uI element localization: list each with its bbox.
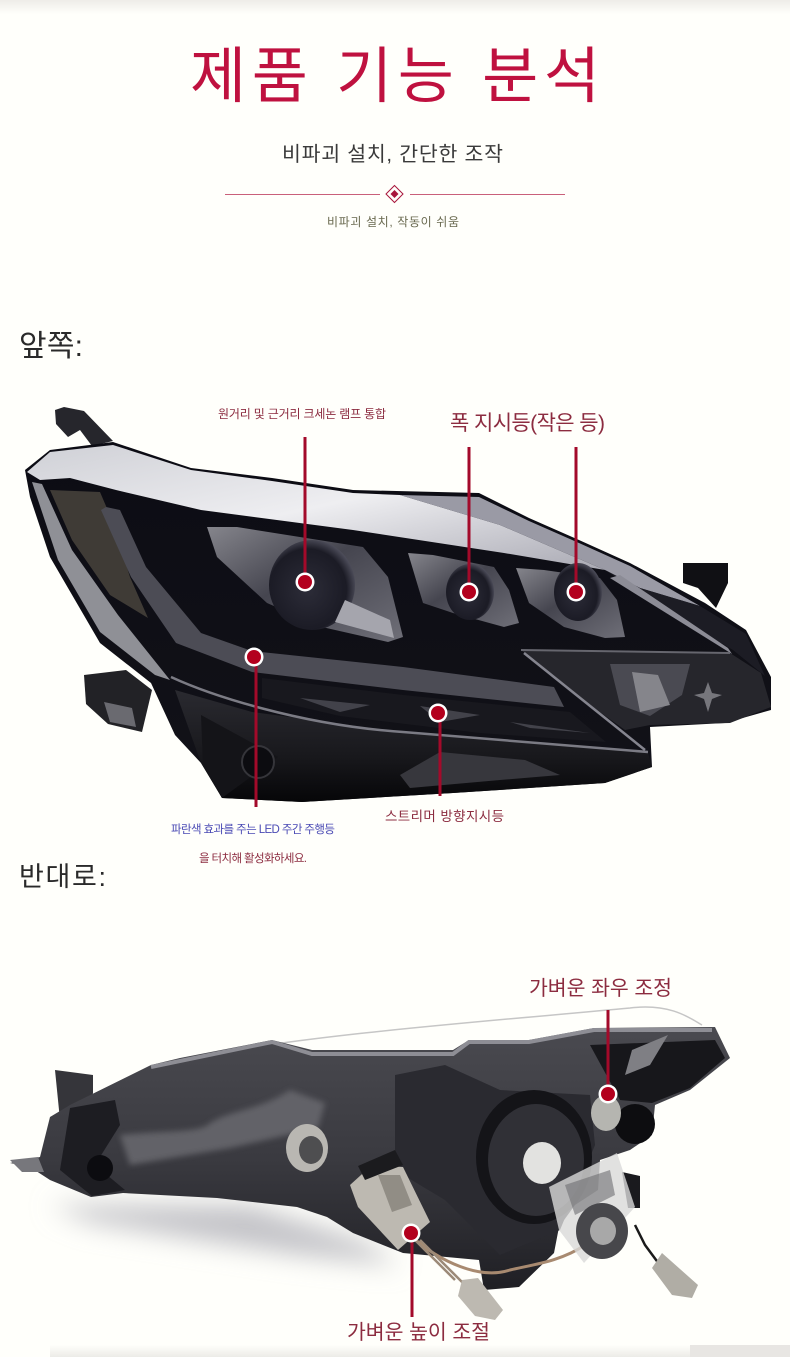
right dark block behind bag (622, 1172, 640, 1208)
lens left inner tint (50, 490, 148, 618)
right dark interior (590, 1040, 725, 1103)
small plug left (458, 1278, 503, 1320)
housing rim highlight (151, 1030, 712, 1067)
callout: width indicators (450, 412, 605, 602)
heading: front: 앞쪽: (19, 330, 83, 363)
body highlight (120, 1090, 325, 1165)
callout: LED daytime running light: 을 터치해 활성화하세요. (199, 851, 307, 865)
lower chin section (175, 690, 652, 802)
lens left pale edge (32, 482, 170, 680)
small caption: 비파괴 설치, 작동이 쉬움 (327, 215, 459, 229)
lamp silhouette (25, 442, 771, 802)
cables (411, 1236, 585, 1273)
rear lamp lower right unit (521, 650, 771, 730)
ballast connector (350, 1165, 430, 1250)
projector housing middle (408, 553, 519, 627)
subtitle: 비파괴 설치, 간단한 조작 (282, 143, 503, 166)
callout: left-right adjustment: 가벼운 좌우 조정 (529, 977, 672, 1000)
side bracket (55, 1070, 93, 1125)
turn signal cluster (262, 678, 606, 742)
triangle trim (524, 653, 645, 750)
callout: height adjustment (347, 1224, 490, 1344)
clear lens upper band (27, 445, 605, 570)
chin highlight line (171, 677, 648, 752)
callout: LED daytime running light (171, 648, 335, 865)
lens right edge band (605, 570, 765, 676)
left end tab (10, 1157, 44, 1172)
main housing (10, 1027, 730, 1290)
left dark ribs (60, 1100, 125, 1196)
ground shadow (50, 1205, 400, 1265)
mid housing block (395, 1065, 595, 1255)
callout: left-right adjustment (529, 977, 672, 1104)
rear unit right bracket (683, 563, 728, 608)
clear lens outline (180, 1007, 702, 1060)
photo: rear of headlight (10, 1007, 730, 1320)
ornamental divider with diamond (225, 186, 565, 202)
mounting bracket top left (55, 407, 113, 446)
callout: LED daytime running light: 파란색 효과를 주는 LED 주간 주행등 (171, 823, 335, 836)
adjuster socket (615, 1104, 655, 1144)
callout: streamer turn signal: 스트리머 방향지시등 (385, 809, 504, 824)
parts bag (549, 1153, 635, 1263)
heading: back: 반대로: (19, 862, 106, 892)
callout: width indicators: 폭 지시등(작은 등) (450, 412, 605, 435)
left connector (84, 670, 152, 732)
large round cover (476, 1090, 592, 1224)
callout: xenon lamp: 원거리 및 근거리 크세논 램프 통합 (218, 407, 386, 421)
projector housing large (207, 527, 403, 642)
small plug right (652, 1253, 698, 1298)
projector housing small (516, 568, 625, 638)
DRL strip (101, 507, 564, 707)
lens upper right translucent band (400, 495, 700, 606)
callout: xenon lamp (218, 407, 386, 592)
bag contents (565, 1170, 615, 1215)
title: 제품 기능 분석 (190, 42, 600, 110)
callout: streamer turn signal (385, 704, 504, 824)
callout: height adjustment: 가벼운 높이 조절 (347, 1321, 490, 1344)
bulb socket (286, 1124, 328, 1172)
photo: front headlight (25, 407, 771, 802)
rubber grommet (576, 1203, 628, 1259)
